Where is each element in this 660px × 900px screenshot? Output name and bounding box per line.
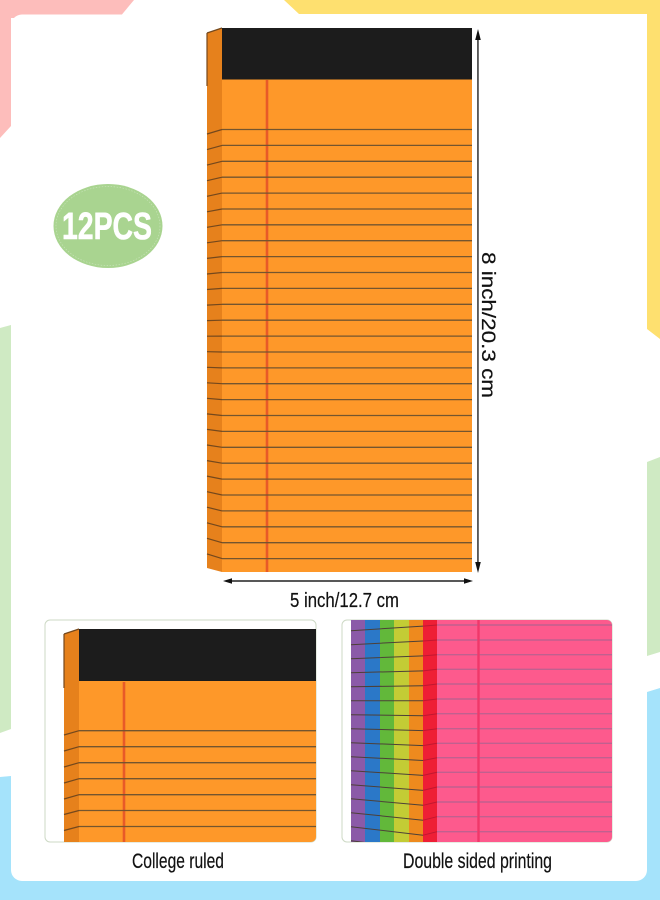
height label: 8 inch/20.3 cm (477, 252, 499, 398)
ruled lines (222, 130, 472, 559)
panel: college ruled (45, 620, 316, 842)
black header band (222, 28, 472, 80)
width arrow (223, 578, 473, 584)
pad side edge (207, 28, 222, 572)
caption: double sided printing: Double sided printing (403, 849, 552, 873)
caption: college ruled: College ruled (132, 849, 224, 873)
red margin line (266, 80, 268, 572)
width label: 5 inch/12.7 cm (290, 589, 399, 612)
pad front sheet (222, 28, 472, 572)
side edge lines (207, 28, 222, 559)
main notepad (207, 28, 472, 572)
panel: double sided printing (342, 620, 612, 850)
height arrow (475, 29, 481, 573)
badge: 12PCS: 12PCS (62, 206, 152, 248)
badge: 12PCS (54, 184, 162, 268)
